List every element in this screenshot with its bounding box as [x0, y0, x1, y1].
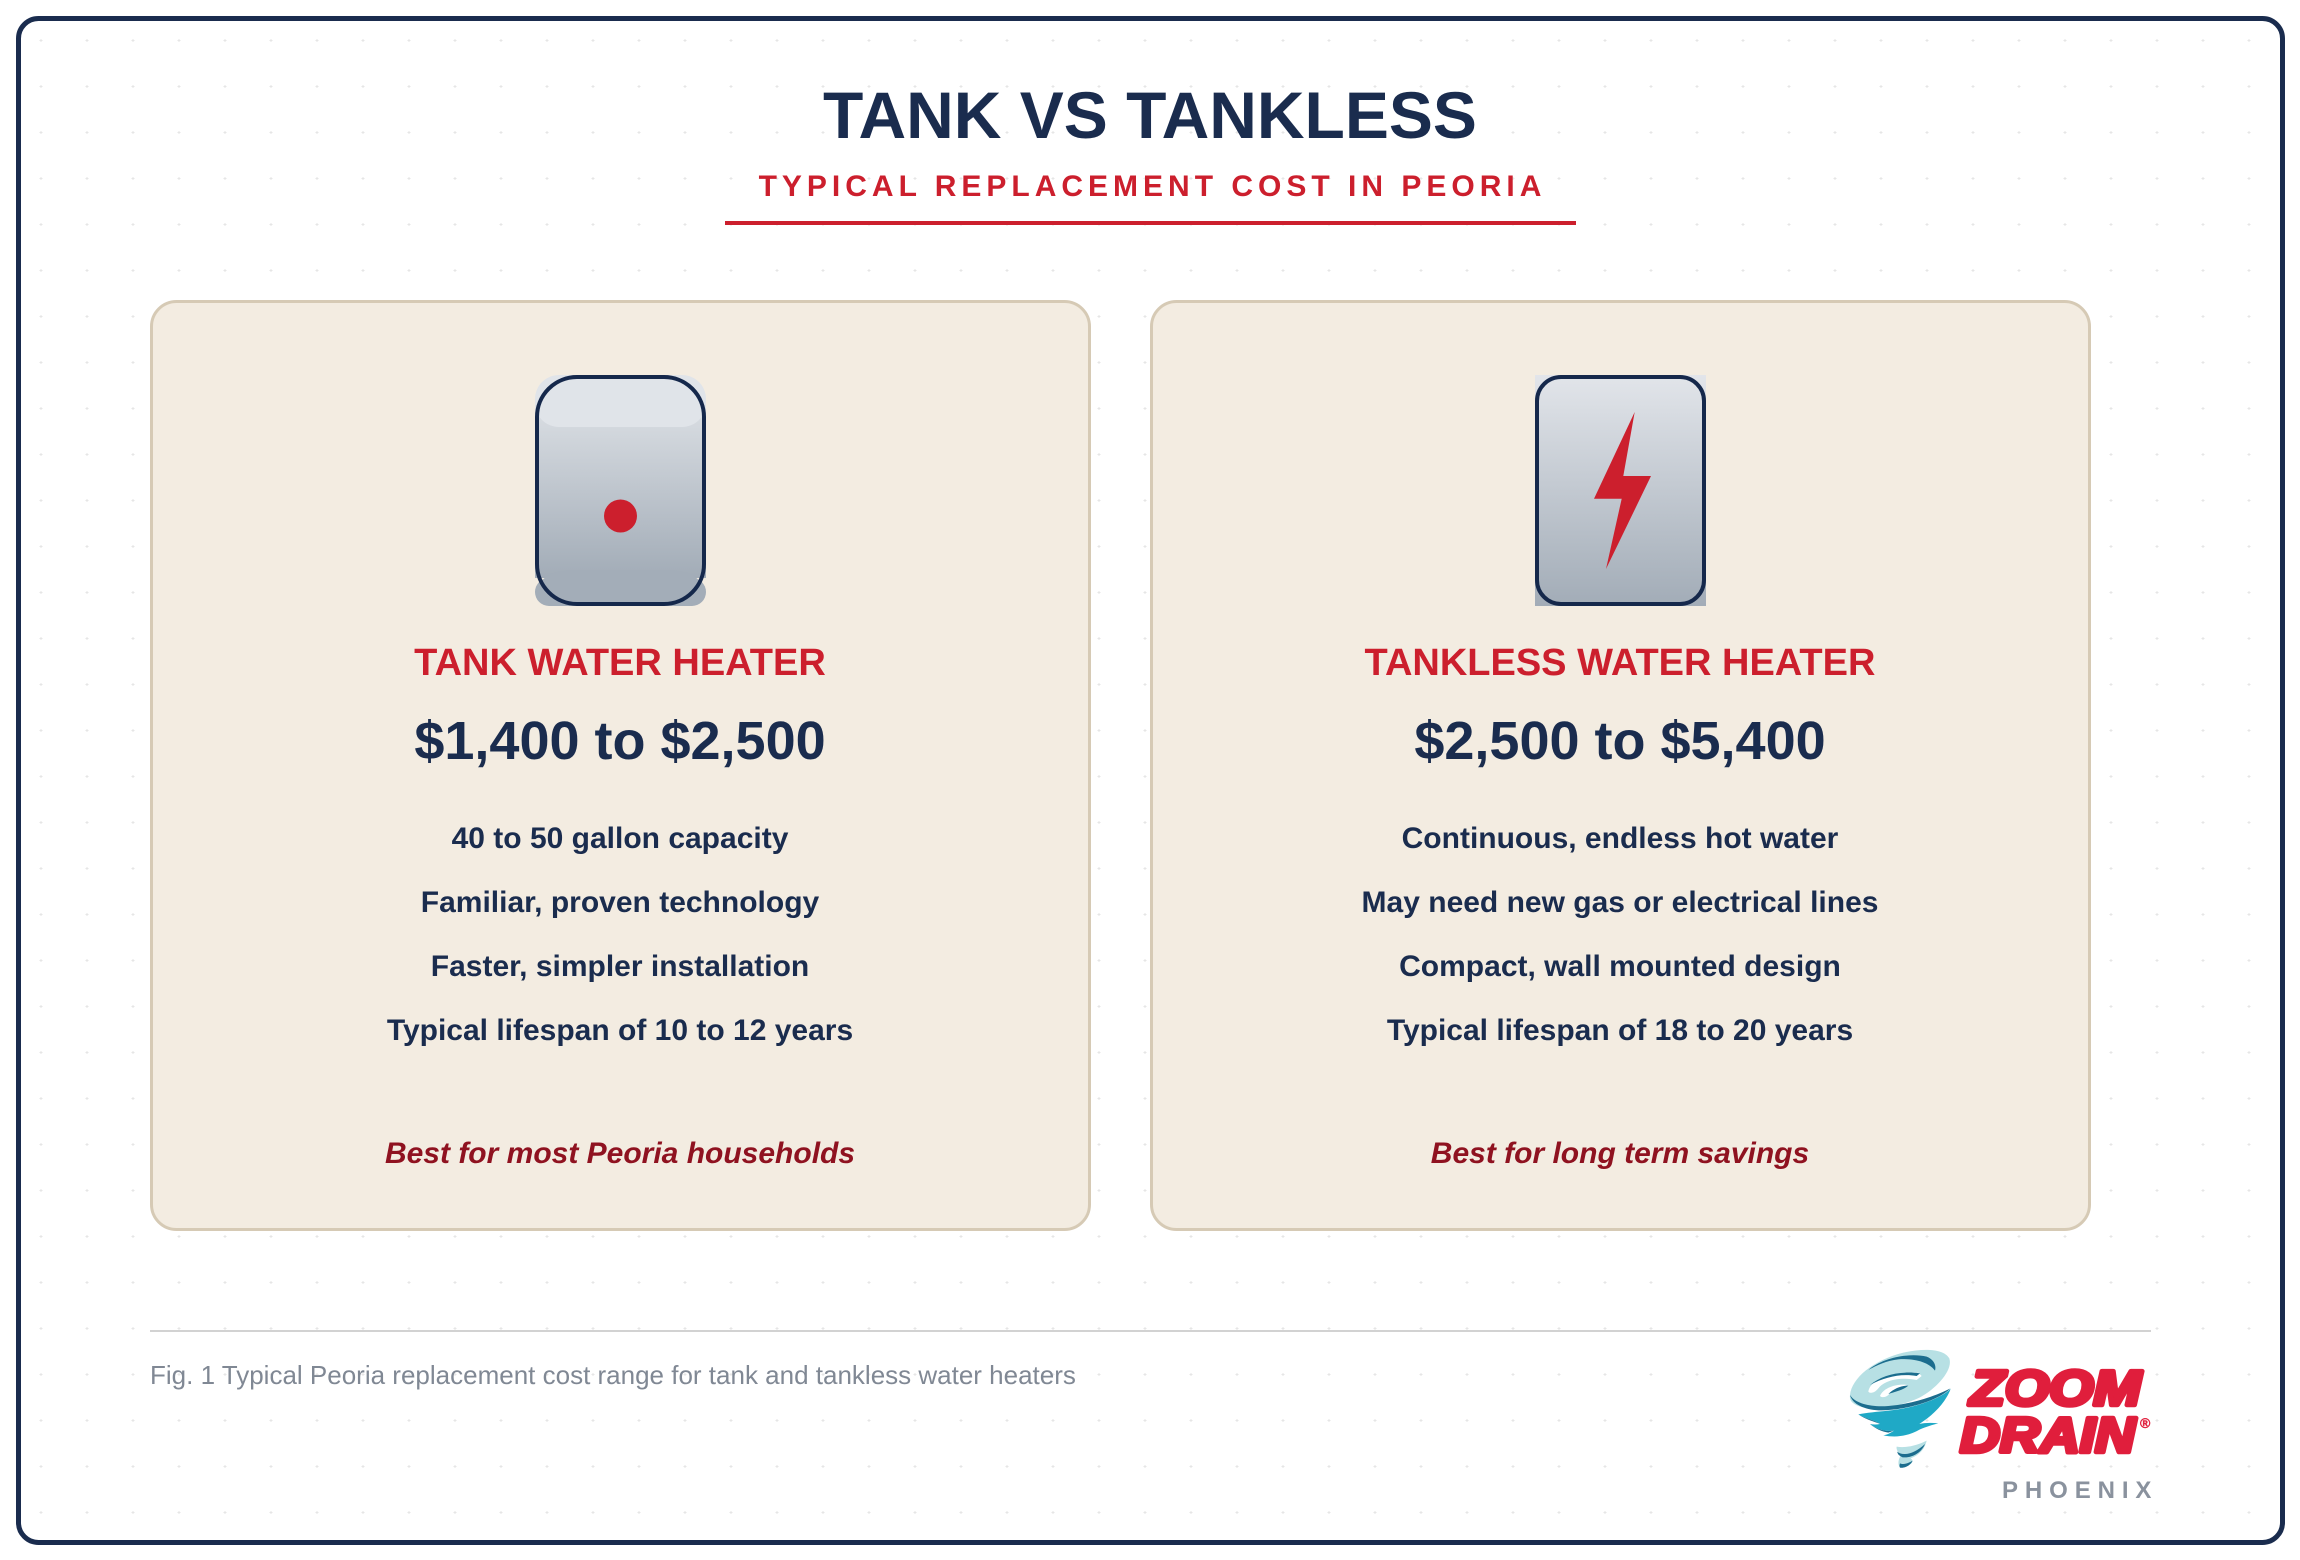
wordmark: ZOOM: ZOOM: [1968, 1362, 2142, 1416]
icon: tornado: [1850, 1350, 1951, 1468]
panel: tank water heater: [152, 302, 1090, 1230]
tankless recommendation: Best for long term savings: [1431, 1137, 1809, 1170]
tank features: 40 to 50 gallon capacity: [452, 822, 789, 855]
location label: PHOENIX: [2002, 1477, 2158, 1504]
logo: Zoom Drain Phoenix: [1850, 1350, 2158, 1504]
panel: tankless water heater: [1152, 302, 2090, 1230]
tankless features: May need new gas or electrical lines: [1362, 886, 1878, 919]
tank heading: TANK WATER HEATER: [414, 642, 826, 684]
panel background: [1152, 302, 2090, 1230]
tankless features: Continuous, endless hot water: [1402, 822, 1839, 855]
panel background: [152, 302, 1090, 1230]
tank features: [387, 822, 853, 1047]
icon: tankless heater: [1535, 375, 1706, 606]
tank features: Faster, simpler installation: [431, 950, 809, 983]
wordmark: DRAIN: DRAIN: [1960, 1409, 2137, 1463]
subtitle: TYPICAL REPLACEMENT COST IN PEORIA: [759, 170, 1546, 203]
icon: tank heater: [535, 375, 706, 606]
tank recommendation: Best for most Peoria households: [385, 1137, 855, 1170]
subtitle underline: [725, 221, 1576, 225]
tankless features: [1362, 822, 1878, 1047]
figure caption: Fig. 1 Typical Peoria replacement cost range for tank and tankless water heaters: [150, 1360, 1076, 1390]
tankless heading: TANKLESS WATER HEATER: [1365, 642, 1875, 684]
tankless features: Compact, wall mounted design: [1399, 950, 1841, 983]
registered mark: ®: [2140, 1415, 2151, 1431]
header: [725, 78, 1576, 225]
tankless price: $2,500 to $5,400: [1414, 711, 1826, 771]
tankless features: Typical lifespan of 18 to 20 years: [1387, 1014, 1853, 1047]
tank features: Familiar, proven technology: [421, 886, 820, 919]
tank features: Typical lifespan of 10 to 12 years: [387, 1014, 853, 1047]
tank price: $1,400 to $2,500: [414, 711, 826, 771]
title: TANK VS TANKLESS: [823, 78, 1477, 152]
